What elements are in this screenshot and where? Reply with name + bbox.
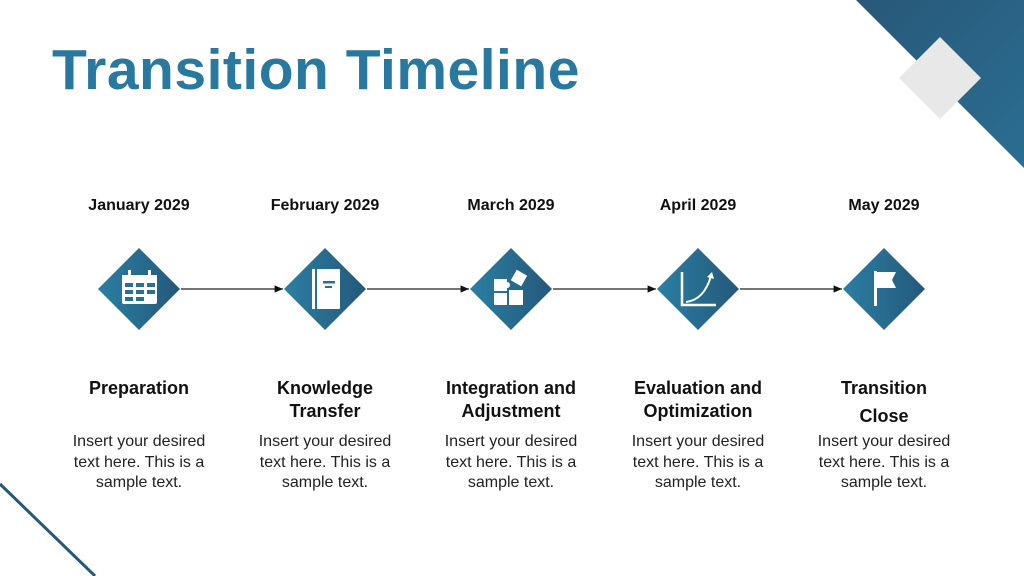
text: Transition — [841, 378, 927, 398]
text: Close — [859, 406, 909, 426]
text: Adjustment — [462, 401, 560, 421]
icon: flag — [843, 248, 925, 330]
text: Optimization — [644, 401, 752, 421]
text: April 2029 — [660, 197, 736, 214]
text: March 2029 — [467, 197, 555, 214]
icon: book — [284, 248, 366, 330]
text: Insert your desired text here. This is a sample text. — [632, 433, 764, 491]
title: Transition Timeline — [52, 38, 580, 102]
text: Knowledge — [277, 378, 373, 398]
icon: calendar — [98, 248, 180, 330]
icon: growth chart — [657, 248, 739, 330]
text: Integration and — [446, 378, 576, 398]
text: February 2029 — [271, 197, 379, 214]
text: Insert your desired text here. This is a sample text. — [259, 433, 391, 491]
text: Insert your desired text here. This is a sample text. — [818, 433, 950, 491]
text: May 2029 — [848, 197, 920, 214]
dates: January 2029 — [88, 197, 190, 214]
step descriptions: Insert your desired text here. This is a sample text. — [73, 433, 205, 491]
step headings: Preparation — [89, 378, 189, 398]
text: Insert your desired text here. This is a sample text. — [445, 433, 577, 491]
text: Transfer — [289, 401, 361, 421]
icon: puzzle — [470, 248, 552, 330]
text: Evaluation and — [634, 378, 762, 398]
